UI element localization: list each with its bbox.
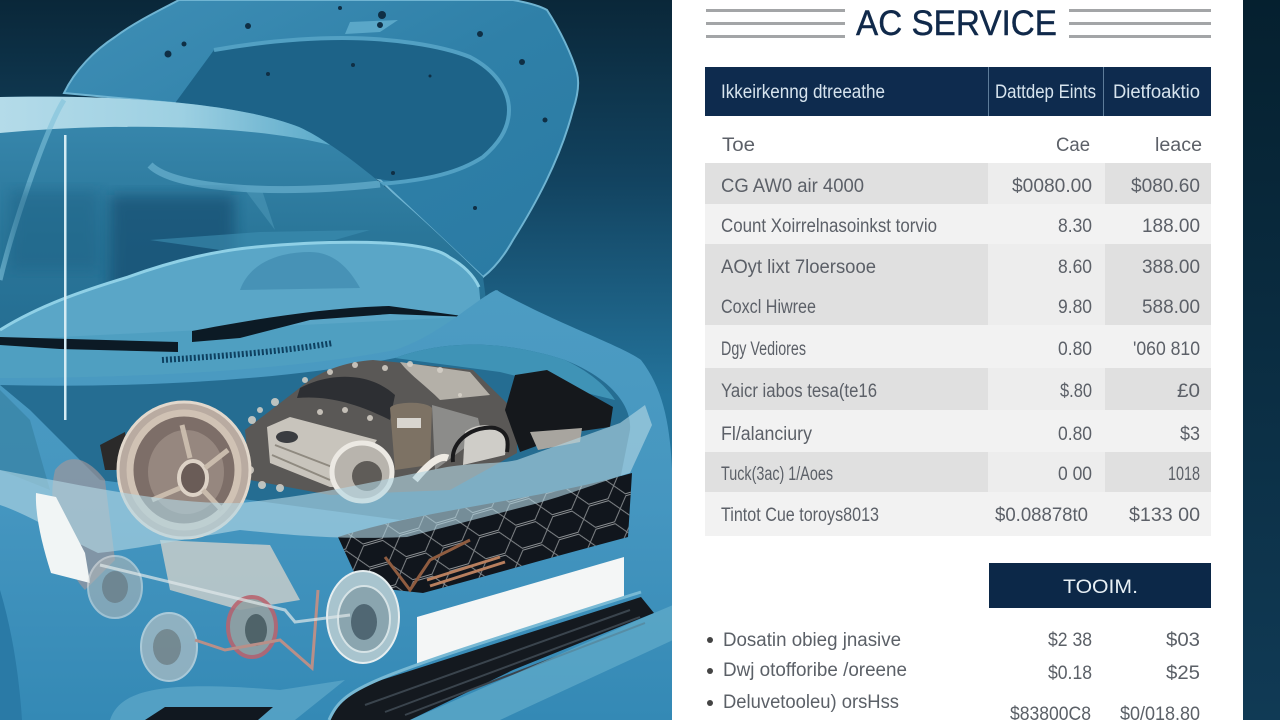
large pulley — [118, 402, 250, 538]
engine — [52, 360, 613, 610]
notes list — [707, 630, 1200, 720]
table rows: 588.00 — [1142, 297, 1200, 318]
table rows: Cae — [1056, 135, 1090, 156]
table rows: '060 810 — [1133, 339, 1200, 360]
notes list: $03 — [1166, 630, 1200, 651]
car body — [0, 290, 673, 720]
grille — [338, 473, 632, 593]
support rod — [64, 135, 66, 420]
right dark strip — [1243, 0, 1280, 720]
left chain detail — [52, 459, 115, 590]
table rows: Dgy Vediores — [721, 339, 806, 360]
table rows: Yaicr iabos tesa(te16 — [721, 381, 877, 402]
table rows: $133 00 — [1129, 505, 1200, 526]
table rows: Toe — [722, 135, 755, 156]
table rows — [705, 135, 1211, 536]
table rows: 388.00 — [1142, 257, 1200, 278]
table rows: 9.80 — [1058, 297, 1092, 318]
translucent bumper band — [0, 405, 652, 553]
notes list: Dwj otofforibe /oreene — [723, 660, 907, 681]
table rows: $3 — [1180, 424, 1200, 445]
open hood — [64, 0, 578, 277]
bumper highlights — [329, 592, 641, 720]
notes list: $0.18 — [1048, 663, 1092, 684]
white panel — [672, 0, 1243, 720]
table rows: $0.08878t0 — [995, 505, 1088, 526]
table rows: CG AW0 air 4000 — [721, 176, 864, 197]
table rows: Fl/alanciury — [721, 424, 812, 445]
engine bay — [0, 345, 630, 520]
table rows: 8.30 — [1058, 216, 1092, 237]
total box — [989, 563, 1211, 608]
table rows: £0 — [1177, 381, 1200, 402]
table rows: 188.00 — [1142, 216, 1200, 237]
table rows: 0 00 — [1058, 464, 1092, 485]
windshield and roof — [0, 97, 492, 350]
notes list: Deluvetooleu) orsHss — [723, 692, 899, 713]
total box: TOOIM. — [1063, 577, 1138, 598]
table rows: $.80 — [1060, 381, 1092, 402]
lower grille — [329, 597, 654, 720]
table header — [705, 67, 1211, 116]
left background — [0, 0, 673, 720]
table rows: Count Xoirrelnasoinkst torvio — [721, 216, 937, 237]
table rows: $0080.00 — [1012, 176, 1092, 197]
licence plate — [417, 557, 624, 665]
title — [706, 4, 1211, 43]
car illustration — [0, 0, 673, 720]
cowl and wipers — [0, 290, 560, 388]
table rows: 1018 — [1168, 464, 1200, 485]
table rows: Tuck(3ac) 1/Aoes — [721, 464, 833, 485]
title: AC SERVICE — [856, 4, 1057, 43]
table rows: $080.60 — [1131, 176, 1200, 197]
table header: Ikkeirkenng dtreeathe — [721, 82, 885, 103]
table rows: 0.80 — [1058, 424, 1092, 445]
notes list: $25 — [1166, 663, 1200, 684]
table rows: AOyt lixt 7loersooe — [721, 257, 876, 278]
table header: Dattdep Eints — [995, 82, 1096, 103]
headlight — [36, 493, 90, 583]
table rows: 8.60 — [1058, 257, 1092, 278]
lower pulleys — [88, 556, 399, 681]
table header: Dietfoaktio — [1113, 82, 1200, 103]
notes list: $2 38 — [1048, 630, 1092, 651]
table rows: leace — [1155, 135, 1202, 156]
table rows: Coxcl Hiwree — [721, 297, 816, 318]
table rows: 0.80 — [1058, 339, 1092, 360]
table rows: Tintot Cue toroys8013 — [721, 505, 879, 526]
notes list: Dosatin obieg jnasive — [723, 630, 901, 651]
